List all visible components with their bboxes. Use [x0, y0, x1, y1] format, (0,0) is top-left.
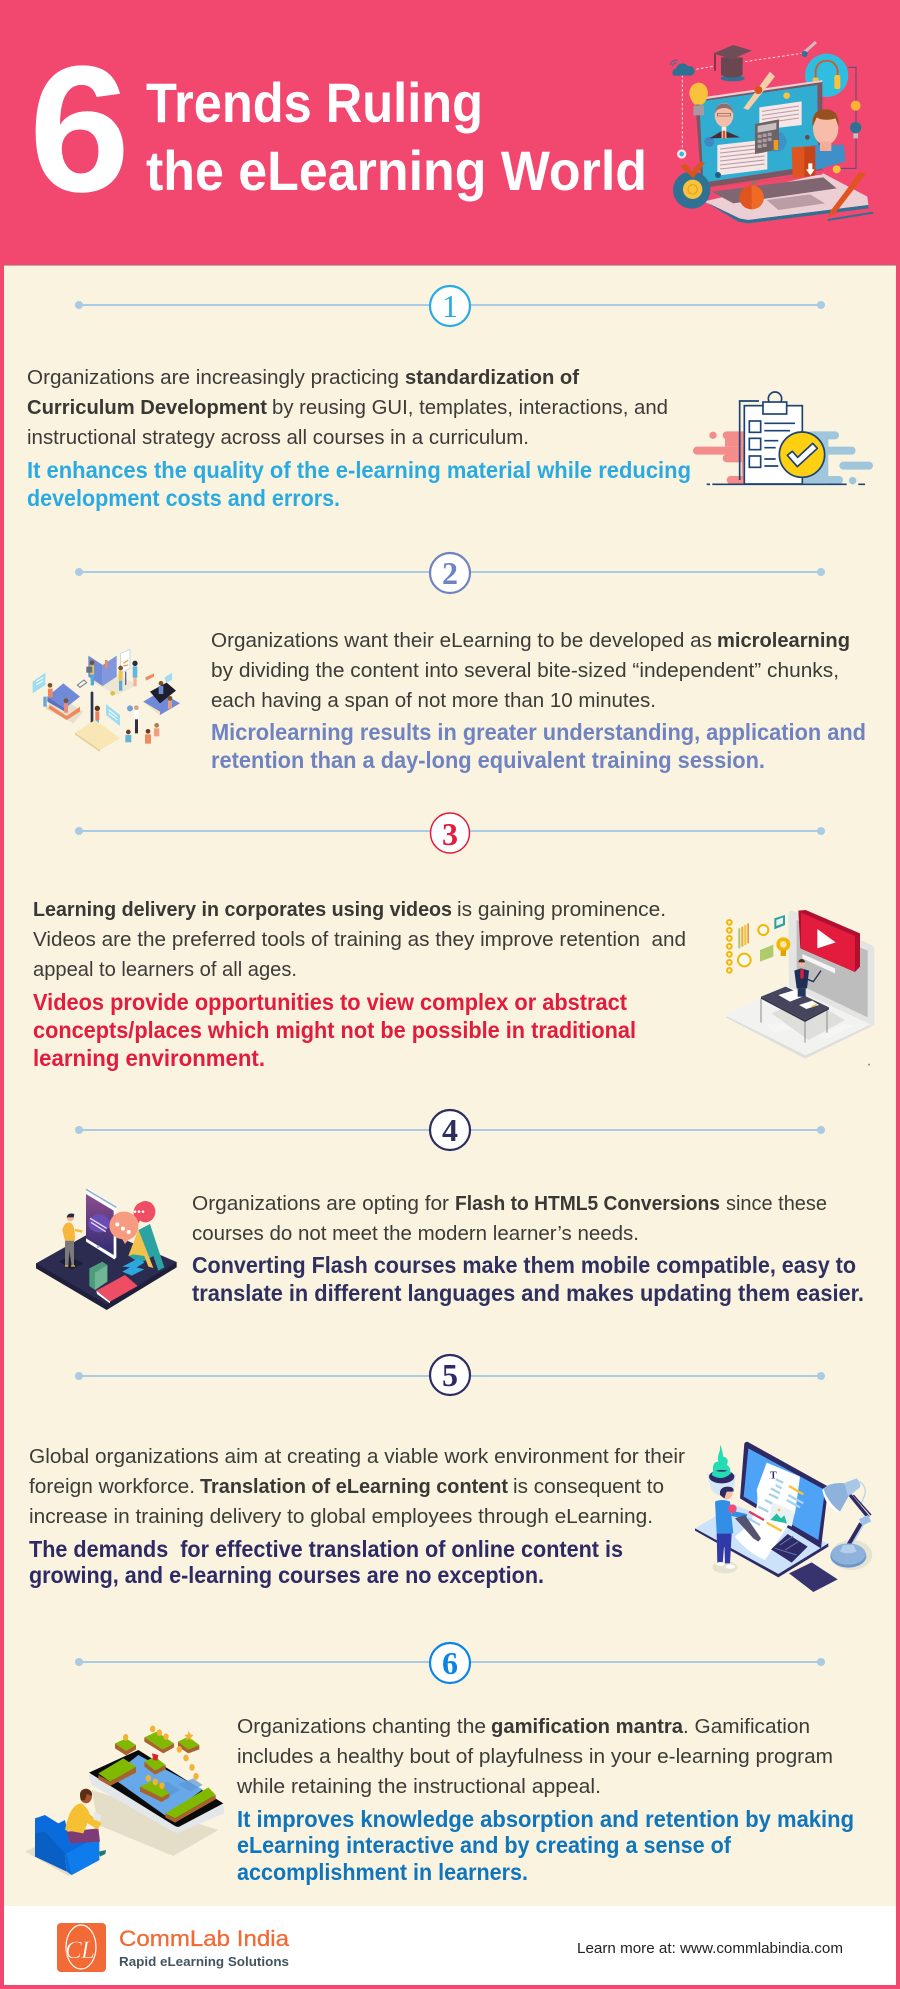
divider 3 — [75, 813, 825, 853]
icon: language courses platform — [36, 1189, 177, 1310]
text block 6: It improves knowledge absorption and retention by making — [237, 1806, 854, 1832]
text block 6: accomplishment in learners. — [237, 1859, 528, 1885]
text block 3: concepts/places which might not be possible in traditional — [33, 1017, 636, 1043]
text block 1: Curriculum Development — [27, 396, 267, 419]
divider 6: 6 — [442, 1645, 458, 1681]
section 3 — [33, 813, 874, 1071]
section 5 — [29, 1355, 872, 1592]
section 2 — [33, 553, 866, 773]
text block 6: includes a healthy bout of playfulness in your e-learning program — [237, 1745, 833, 1768]
text block 5: foreign workforce. — [29, 1475, 195, 1498]
text block 2: by dividing the content into several bite-sized “independent” chunks, — [211, 659, 839, 682]
text block 1: Organizations are increasingly practicing — [27, 366, 399, 389]
icon: isometric learning group — [33, 649, 180, 752]
text block 1: standardization of — [405, 366, 579, 389]
divider 1: 1 — [442, 288, 458, 324]
section 4 — [36, 1110, 864, 1310]
learn more link text: Learn more at: www.commlabindia.com — [577, 1940, 843, 1957]
divider 1 — [75, 286, 825, 326]
section 1 — [27, 286, 869, 511]
icon: laptop with learning items — [670, 42, 873, 223]
text block 4: Flash to HTML5 Conversions — [455, 1192, 720, 1215]
text block 1: instructional strategy across all courses in a curriculum. — [27, 426, 529, 449]
text block 6 — [236, 1715, 854, 1885]
text block 4 — [192, 1192, 864, 1306]
text block 6: while retaining the instructional appeal. — [236, 1775, 601, 1798]
text block 4: translate in different languages and makes updating them easier. — [192, 1280, 864, 1306]
icon: person editing document on laptop — [695, 1442, 872, 1592]
section 6 — [25, 1643, 854, 1885]
icon: mobile game player — [25, 1726, 224, 1876]
text block 5: growing, and e-learning courses are no exception. — [29, 1562, 544, 1588]
header — [29, 29, 873, 230]
text block 5: is consequent to — [513, 1475, 664, 1498]
icon: checklist clipboard — [697, 392, 869, 484]
text block 4: Organizations are opting for — [192, 1192, 449, 1215]
text block 1: development costs and errors. — [27, 485, 340, 511]
text block 3: appeal to learners of all ages. — [33, 958, 297, 981]
text block 5: increase in training delivery to global employees through eLearning. — [29, 1505, 653, 1528]
text block 1: by reusing GUI, templates, interactions, and — [272, 396, 668, 419]
title: Trends Ruling — [146, 71, 483, 134]
text block 5: Translation of eLearning content — [200, 1475, 508, 1498]
text block 4: since these — [726, 1192, 827, 1215]
text block 3: learning environment. — [33, 1045, 265, 1071]
text block 1: It enhances the quality of the e-learning material while reducing — [27, 457, 691, 483]
text block 6: eLearning interactive and by creating a sense of — [237, 1832, 731, 1858]
title — [146, 71, 647, 202]
logo mark — [57, 1923, 106, 1972]
text block 3: Videos are the preferred tools of training as they improve retention and — [33, 928, 686, 951]
text block 2 — [211, 629, 866, 773]
divider 4: 4 — [442, 1112, 458, 1148]
tagline: Rapid eLearning Solutions — [119, 1954, 289, 1969]
icon: video lesson on laptop — [725, 910, 874, 1066]
big number 6: 6 — [29, 29, 130, 230]
text block 5: Global organizations aim at creating a viable work environment for their — [29, 1445, 685, 1468]
logo mark: L — [80, 1937, 95, 1964]
divider 5 — [75, 1355, 825, 1395]
divider 6 — [75, 1643, 825, 1683]
divider 3: 3 — [442, 816, 458, 852]
text block 6: gamification mantra — [491, 1715, 684, 1738]
text block 3: Videos provide opportunities to view complex or abstract — [33, 989, 627, 1015]
text block 2: microlearning — [717, 629, 850, 652]
text block 4: courses do not meet the modern learner’s needs. — [192, 1222, 639, 1245]
title: the eLearning World — [146, 139, 647, 202]
divider 4 — [75, 1110, 825, 1150]
text block 3 — [33, 898, 686, 1071]
divider 2 — [75, 553, 825, 593]
text block 2: Organizations want their eLearning to be developed as — [211, 629, 712, 652]
divider 5: 5 — [442, 1357, 458, 1393]
footer — [4, 1906, 896, 1985]
text block 2: Microlearning results in greater understanding, application and — [211, 719, 866, 745]
footer white bar — [4, 1906, 896, 1985]
text block 2: each having a span of not more than 10 minutes. — [211, 689, 656, 712]
text block 1 — [27, 366, 691, 511]
text block 6: . Gamification — [683, 1715, 810, 1738]
text block 5: The demands for effective translation of online content is — [29, 1536, 623, 1562]
text block 3: is gaining prominence. — [457, 898, 666, 921]
brand name: CommLab India — [119, 1926, 290, 1951]
text block 6: Organizations chanting the — [237, 1715, 486, 1738]
text block 5 — [29, 1445, 685, 1588]
icon: person editing document on laptop: T — [770, 1470, 777, 1481]
logo mark: C — [65, 1937, 82, 1964]
text block 3: Learning delivery in corporates using videos — [33, 898, 452, 921]
text block 4: Converting Flash courses make them mobile compatible, easy to — [192, 1252, 856, 1278]
divider 2: 2 — [442, 555, 458, 591]
text block 2: retention than a day-long equivalent training session. — [211, 747, 765, 773]
